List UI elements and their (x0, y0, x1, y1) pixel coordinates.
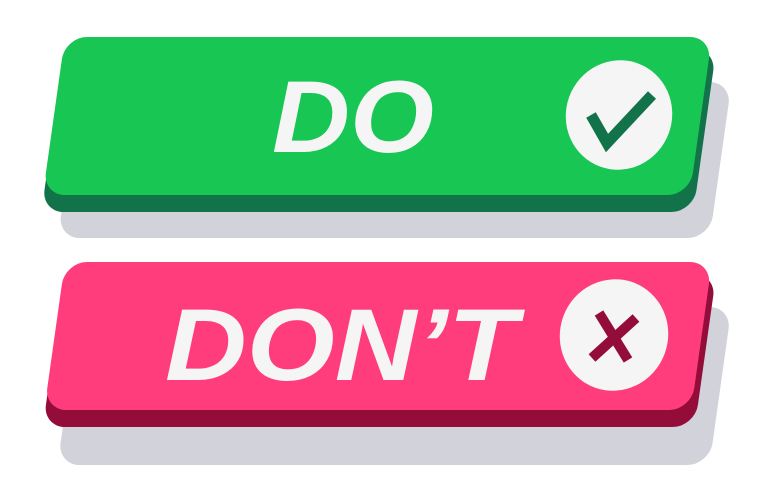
button: DO (41, 37, 732, 238)
icon: check circle (550, 45, 688, 185)
side: DO button (41, 49, 716, 212)
side: DON'T button (43, 274, 716, 427)
face: DO button (43, 37, 712, 195)
icon: cross circle (544, 264, 684, 406)
button: DON'T (43, 262, 732, 465)
face: DON'T button (44, 262, 712, 410)
shadow: DON'T button (57, 307, 732, 465)
label: DON'T: DON’T (165, 288, 526, 402)
label: DO: DO (272, 60, 434, 174)
shadow: DO button (58, 82, 732, 238)
